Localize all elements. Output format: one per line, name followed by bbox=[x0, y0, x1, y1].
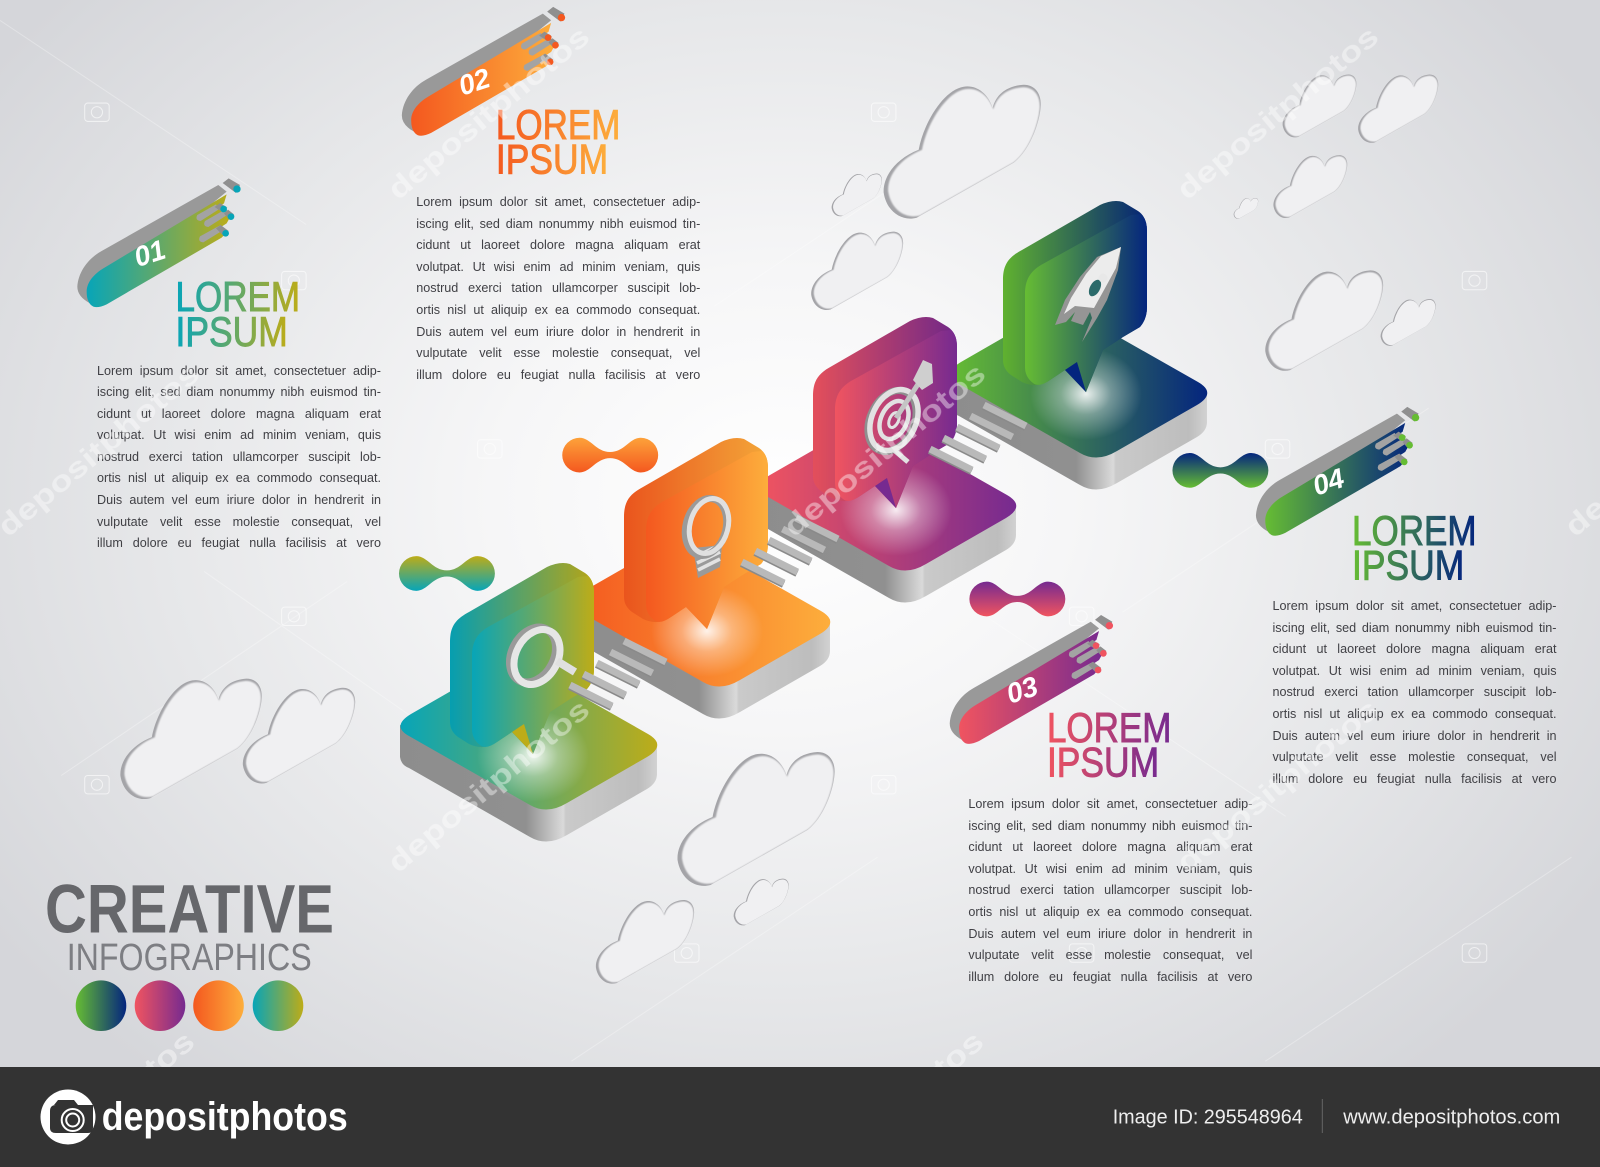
text block 02: iscing elit, sed diam nonummy nibh euismod tin- bbox=[416, 217, 700, 231]
text block 02: cidunt ut laoreet dolore magna aliquam erat bbox=[416, 238, 700, 252]
text block 03: Lorem ipsum dolor sit amet, consectetuer adip- bbox=[968, 797, 1252, 811]
steps between platforms 1 and 2 bbox=[570, 641, 666, 708]
heading 01: IPSUM bbox=[176, 308, 288, 355]
platform 2: orange with bulb bbox=[573, 438, 830, 719]
steps between platforms 2 and 3 bbox=[742, 518, 838, 584]
number pill 04: 04 bbox=[1309, 462, 1348, 501]
heading 02 bbox=[496, 101, 620, 182]
icon: rocket bbox=[1055, 247, 1121, 342]
number pill 02: 02 bbox=[455, 62, 494, 101]
text block 04: nostrud exerci tation ullamcorper suscipit lob- bbox=[1272, 685, 1556, 699]
icon: magnifier bbox=[501, 620, 575, 692]
text block 03: cidunt ut laoreet dolore magna aliquam erat bbox=[968, 840, 1252, 854]
text block 04: iscing elit, sed diam nonummy nibh euismod tin- bbox=[1272, 621, 1556, 635]
icon: target with arrow bbox=[859, 360, 933, 462]
platform 3: pink-purple with target bbox=[759, 317, 1016, 603]
title: creative infographics: INFOGRAPHICS bbox=[67, 937, 312, 979]
text block 03: illum dolore eu feugiat nulla facilisis at vero bbox=[968, 970, 1252, 984]
connector blob: magenta bbox=[969, 582, 1065, 616]
text block 02: illum dolore eu feugiat nulla facilisis at vero bbox=[416, 368, 700, 382]
heading 04: LOREM bbox=[1352, 507, 1477, 554]
heading 02: LOREM bbox=[496, 101, 620, 148]
text block 02: Duis autem vel eum iriure dolor in hendrerit in bbox=[416, 325, 700, 339]
title: creative infographics bbox=[45, 871, 334, 979]
footer image id: Image ID: 295548964 bbox=[1113, 1106, 1303, 1128]
text block 04: ortis nisl ut aliquip ex ea commodo consequat. bbox=[1272, 707, 1556, 721]
number pill 04 bbox=[1256, 407, 1419, 536]
text block 04: illum dolore eu feugiat nulla facilisis at vero bbox=[1272, 772, 1556, 786]
text block 04: Lorem ipsum dolor sit amet, consectetuer adip- bbox=[1272, 599, 1556, 613]
footer logo wordmark: depositphotos bbox=[102, 1095, 348, 1139]
text block 01 bbox=[97, 364, 381, 550]
number pill 01 bbox=[77, 178, 241, 307]
text block 03: nostrud exerci tation ullamcorper suscipit lob- bbox=[968, 883, 1252, 897]
watermark text overlays: depositphotos bbox=[777, 357, 992, 543]
text block 01: vulputate velit esse molestie consequat, vel bbox=[97, 515, 381, 529]
number pill 01: 01 bbox=[130, 234, 169, 273]
connector blob: orange bbox=[562, 438, 658, 472]
heading 03 bbox=[1047, 704, 1171, 786]
text block 01: cidunt ut laoreet dolore magna aliquam erat bbox=[97, 407, 381, 421]
watermark text overlays: depositphotos bbox=[381, 693, 596, 879]
heading 02: IPSUM bbox=[496, 135, 608, 182]
colour palette circles bbox=[76, 980, 303, 1031]
text block 02: volutpat. Ut wisi enim ad minim veniam, quis bbox=[416, 260, 700, 274]
text block 01: nostrud exerci tation ullamcorper suscipit lob- bbox=[97, 450, 381, 464]
text block 02: nostrud exerci tation ullamcorper suscipit lob- bbox=[416, 281, 700, 295]
platform 1: teal-olive with magnifier bbox=[400, 563, 657, 842]
watermark text overlays: depositphotos bbox=[381, 20, 596, 206]
number pill 03 bbox=[950, 615, 1113, 744]
number pill 02 bbox=[402, 7, 565, 136]
text block 03: vulputate velit esse molestie consequat, vel bbox=[968, 948, 1252, 962]
heading 04: IPSUM bbox=[1352, 542, 1464, 589]
clouds bbox=[120, 74, 1438, 984]
text block 04: vulputate velit esse molestie consequat, vel bbox=[1272, 750, 1556, 764]
text block 04: Duis autem vel eum iriure dolor in hendrerit in bbox=[1272, 729, 1556, 743]
text block 03: ortis nisl ut aliquip ex ea commodo consequat. bbox=[968, 905, 1252, 919]
text block 02 bbox=[416, 195, 700, 382]
footer bar bbox=[0, 1067, 1600, 1167]
watermark text overlays: depositphotos bbox=[1170, 693, 1385, 879]
text block 03: volutpat. Ut wisi enim ad minim veniam, quis bbox=[968, 862, 1252, 876]
text block 01: volutpat. Ut wisi enim ad minim veniam, quis bbox=[97, 428, 381, 442]
text block 01: illum dolore eu feugiat nulla facilisis at vero bbox=[97, 536, 381, 550]
text block 02: Lorem ipsum dolor sit amet, consectetuer adip- bbox=[416, 195, 700, 209]
text block 04: volutpat. Ut wisi enim ad minim veniam, quis bbox=[1272, 664, 1556, 678]
text block 04 bbox=[1272, 599, 1556, 786]
footer website url: www.depositphotos.com bbox=[1342, 1106, 1560, 1128]
camera watermark icons bbox=[85, 103, 1487, 962]
text block 03: iscing elit, sed diam nonummy nibh euismod tin- bbox=[968, 819, 1252, 833]
footer logo: camera icon bbox=[40, 1090, 96, 1144]
text block 04: cidunt ut laoreet dolore magna aliquam erat bbox=[1272, 642, 1556, 656]
text block 01: Lorem ipsum dolor sit amet, consectetuer adip- bbox=[97, 364, 381, 378]
icon: light bulb bbox=[679, 494, 735, 578]
title: creative infographics: CREATIVE bbox=[45, 871, 334, 948]
text block 02: vulputate velit esse molestie consequat, vel bbox=[416, 346, 700, 360]
heading 03: LOREM bbox=[1047, 704, 1171, 751]
connector blob: navy bbox=[1172, 453, 1268, 488]
steps between platforms 3 and 4 bbox=[930, 405, 1026, 472]
heading 01: LOREM bbox=[176, 273, 300, 320]
text block 01: ortis nisl ut aliquip ex ea commodo consequat. bbox=[97, 471, 381, 485]
watermark text overlays: depositphotos bbox=[1170, 20, 1385, 206]
heading 04 bbox=[1352, 507, 1477, 589]
number pill 03: 03 bbox=[1003, 670, 1042, 710]
heading 03: IPSUM bbox=[1047, 739, 1159, 786]
text block 02: ortis nisl ut aliquip ex ea commodo consequat. bbox=[416, 303, 700, 317]
text block 01: iscing elit, sed diam nonummy nibh euismod tin- bbox=[97, 385, 381, 399]
text block 03: Duis autem vel eum iriure dolor in hendrerit in bbox=[968, 927, 1252, 941]
text block 03 bbox=[968, 797, 1252, 984]
heading 01 bbox=[176, 273, 300, 355]
text block 01: Duis autem vel eum iriure dolor in hendrerit in bbox=[97, 493, 381, 507]
platform 4: green-navy with rocket bbox=[950, 201, 1207, 490]
connector blob: teal bbox=[399, 556, 495, 591]
